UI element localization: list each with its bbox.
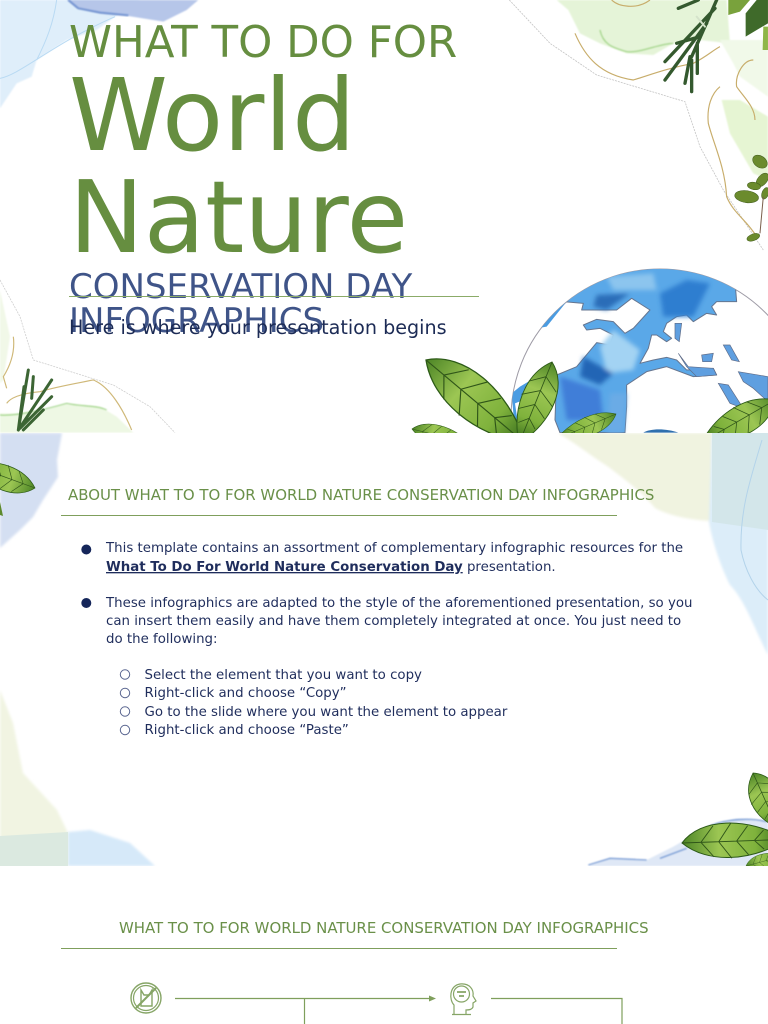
connector: head icon to right	[491, 998, 622, 1024]
icon: head with globe	[451, 984, 476, 1014]
globe: deep water patches	[560, 273, 710, 433]
icon: rosemary sprig bottom left	[18, 370, 52, 430]
watercolor: bottom-left green wash	[0, 280, 175, 433]
watercolor: top-right green wash	[509, 0, 768, 250]
heading: WHAT TO TO FOR WORLD NATURE CONSERVATION DAY INFOGRAPHICS	[119, 919, 649, 937]
bullet: second paragraph	[81, 596, 692, 647]
globe	[510, 268, 768, 433]
title: INFOGRAPHICS	[69, 301, 324, 341]
icon: no plastic bag	[131, 983, 161, 1013]
bullet: second paragraph: can insert them easily and have them completely integrated at once. You just need to	[106, 614, 681, 629]
watercolor: top-right blue wash	[709, 433, 768, 655]
title: Nature	[69, 159, 408, 276]
subtitle: Here is where your presentation begins	[69, 316, 447, 339]
globe: ocean	[555, 260, 737, 433]
icon: dark leaves top right	[728, 0, 768, 50]
watercolor: top-right green wash	[558, 433, 712, 521]
title: WHAT TO DO FOR	[69, 18, 457, 68]
slide 3: infographic	[0, 866, 768, 1024]
globe: rim water	[512, 302, 566, 420]
title: World	[69, 57, 356, 174]
sub-list: steps: Go to the slide where you want the element to appear	[144, 705, 508, 720]
bullet: first paragraph: What To Do For World Nature Conservation Day presentation.	[106, 560, 556, 575]
globe: inland seas	[675, 323, 768, 408]
icon: rosemary sprig top right	[665, 0, 717, 92]
watercolor: bottom-right blue wash	[588, 818, 768, 866]
icon: bottom-right leaves	[681, 772, 768, 866]
title: CONSERVATION DAY	[69, 267, 412, 307]
sub-list: steps	[120, 668, 508, 738]
slide 1: cover	[0, 0, 768, 433]
sub-list: steps: Select the element that you want to copy	[144, 668, 422, 683]
bullet: first paragraph	[81, 541, 683, 575]
heading: ABOUT WHAT TO TO FOR WORLD NATURE CONSERVATION DAY INFOGRAPHICS	[68, 486, 654, 504]
watercolor: top-left blue wash	[0, 0, 116, 108]
icon: leaf on left edge	[0, 463, 36, 516]
icon: small leaves right	[734, 152, 768, 243]
arrow: connector to head icon	[175, 996, 436, 1024]
sub-list: steps: Right-click and choose “Copy”	[144, 686, 347, 701]
icon: leaf cluster at globe base	[412, 358, 768, 433]
watercolor: bottom-left green wash	[0, 692, 68, 836]
slide 2: about	[0, 433, 768, 873]
sub-list: steps: Right-click and choose “Paste”	[144, 723, 349, 738]
divider line	[61, 515, 617, 516]
watercolor: top periwinkle blob	[67, 0, 198, 22]
bullet: second paragraph: These infographics are adapted to the style of the aforementioned presentation, so you	[105, 596, 692, 611]
watercolor: bottom-left blue wash	[0, 830, 155, 866]
title	[69, 18, 457, 341]
watercolor: top-left periwinkle wash	[0, 433, 62, 548]
divider line	[69, 296, 479, 297]
bullet: second paragraph: do the following:	[106, 632, 218, 647]
bullet: first paragraph: This template contains an assortment of complementary infographic resources for the	[105, 541, 683, 556]
divider line	[61, 948, 617, 949]
